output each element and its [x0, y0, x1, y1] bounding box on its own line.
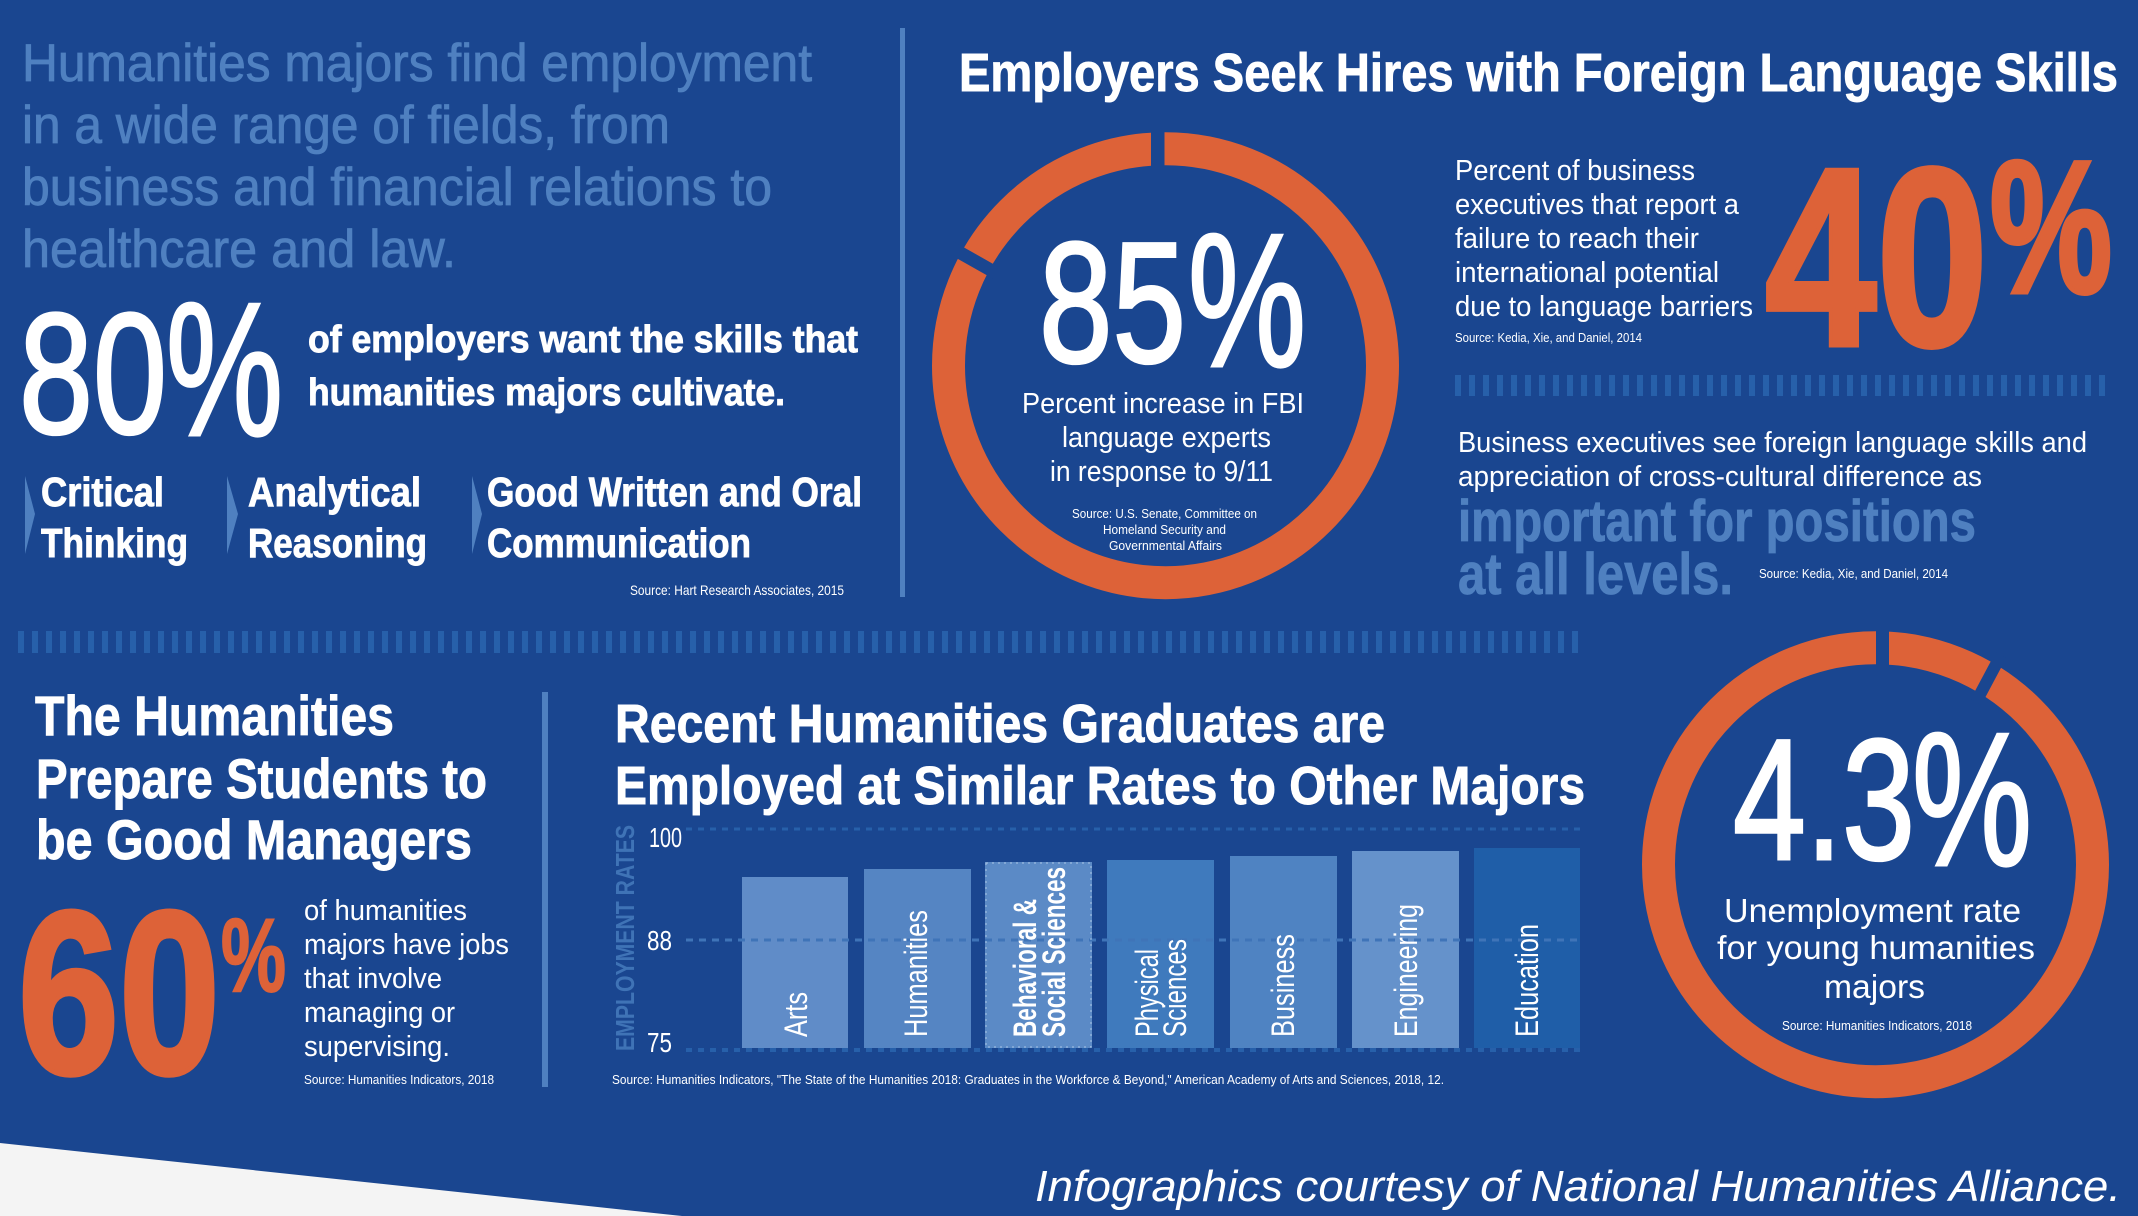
text: language barriers: executives that report a: [1455, 189, 1740, 221]
bar labels: Engineering: [1388, 904, 1424, 1037]
text: important for positions: important for positions: [1458, 489, 1976, 554]
skill: analytical reasoning: [227, 469, 427, 566]
bar: business: [1230, 856, 1337, 1048]
dashed band middle: [18, 631, 1580, 653]
stat: 80 percent: [19, 264, 283, 476]
bar: arts: [742, 877, 848, 1048]
bar labels: Sciences: [1157, 939, 1193, 1037]
skill: critical thinking: Thinking: [41, 520, 188, 566]
text: unemployment rate: [1717, 892, 2035, 1005]
heading: good managers: be Good Managers: [36, 808, 472, 871]
stat description: employers: humanities majors cultivate.: [308, 372, 785, 414]
title: bar chart: [615, 694, 1585, 816]
bar: behavioral and social sciences: [985, 862, 1092, 1048]
text: language barriers: international potential: [1455, 257, 1719, 289]
bar labels: Behavioral &: [1007, 899, 1043, 1037]
text: business executives: Business executives see foreign language skills and: [1458, 427, 2087, 459]
bar chart: [610, 822, 1582, 1058]
bar labels: Humanities: [898, 910, 934, 1037]
skill: critical thinking: [25, 469, 188, 566]
dashed band right: [1455, 375, 2110, 396]
vertical divider top: [900, 28, 905, 597]
text: business executives: appreciation of cross-cultural difference as: [1458, 461, 1982, 493]
text: important for positions: [1458, 489, 1976, 607]
stat: 80 percent: 80: [19, 278, 167, 470]
source: Kedia 2: Source: Kedia, Xie, and Daniel, 2014: [1759, 566, 1948, 581]
credit line: Infographics courtesy of National Humanities Alliance.: [1035, 1162, 2121, 1211]
heading: good managers: [35, 684, 487, 871]
title: bar chart: Employed at Similar Rates to Other Majors: [615, 756, 1585, 816]
stat: 85 percent: 85: [1039, 207, 1186, 399]
white corner wedge: [0, 1143, 682, 1216]
donut: 4.3 percent: [1658, 624, 2092, 1082]
bar: education: [1474, 848, 1580, 1048]
source: Senate: Governmental Affairs: [1109, 538, 1222, 553]
text: managing or supervising: of humanities: [304, 895, 467, 927]
text: FBI language experts: [1022, 388, 1304, 488]
intro heading: business and financial relations to: [22, 158, 772, 217]
bar labels: [778, 867, 1545, 1037]
stat: 60 percent: 60: [18, 864, 220, 1123]
text: language barriers: [1455, 155, 1753, 323]
heading: good managers: The Humanities: [35, 684, 394, 747]
text: FBI language experts: Percent increase in FBI: [1022, 388, 1304, 420]
text: language barriers: Percent of business: [1455, 155, 1695, 187]
source: Senate: [1072, 506, 1257, 553]
stat: 4.3 percent: 4.3: [1733, 704, 1915, 896]
source: indicators 2: Source: Humanities Indicators, 2018: [1782, 1018, 1972, 1033]
heading: good managers: Prepare Students to: [36, 747, 487, 810]
skill: communication: Communication: [487, 520, 751, 566]
stat: 4.3 percent: %: [1912, 694, 2032, 906]
stat: 40 percent: 40: [1765, 115, 1988, 399]
stat: 80 percent: %: [166, 264, 283, 476]
y axis title: EMPLOYMENT RATES: [610, 825, 640, 1051]
title: bar chart: Recent Humanities Graduates are: [615, 694, 1385, 754]
intro heading: in a wide range of fields, from: [22, 96, 670, 155]
source: chart: Source: Humanities Indicators, "The State of the Humanities 2018: Graduates in the Workforce & Beyond," American Academy of Arts and Sciences, 2018, 12.: [612, 1072, 1444, 1087]
stat: 60 percent: %: [221, 898, 286, 1014]
stat: 85 percent: %: [1188, 195, 1306, 407]
text: business executives: [1458, 427, 2087, 493]
bar labels: Arts: [778, 992, 814, 1037]
source: Hart: Source: Hart Research Associates, 2015: [630, 582, 844, 598]
text: managing or supervising: [304, 895, 509, 1063]
bar: physical sciences: [1107, 860, 1214, 1048]
text: managing or supervising: managing or: [304, 997, 455, 1029]
y axis ticks: 100: [649, 822, 682, 853]
skill: analytical reasoning: Analytical: [248, 469, 421, 515]
source: indicators 1: Source: Humanities Indicators, 2018: [304, 1072, 494, 1087]
text: FBI language experts: language experts: [1062, 422, 1271, 454]
skill: analytical reasoning: Reasoning: [248, 520, 427, 566]
text: FBI language experts: in response to 9/11: [1050, 456, 1273, 488]
intro heading: [22, 34, 812, 279]
intro heading: Humanities majors find employment: [22, 34, 812, 93]
source: Kedia 1: Source: Kedia, Xie, and Daniel, 2014: [1455, 330, 1642, 345]
text: unemployment rate: Unemployment rate: [1724, 892, 2021, 929]
donut: 85 percent: [948, 125, 1382, 583]
skill: communication: [472, 469, 862, 566]
y axis ticks: [647, 822, 682, 1058]
stat description: employers: of employers want the skills that: [308, 319, 858, 361]
text: managing or supervising: majors have jobs: [304, 929, 509, 961]
bar: humanities: [864, 869, 971, 1048]
intro heading: healthcare and law.: [22, 220, 456, 279]
bar: engineering: [1352, 851, 1459, 1048]
source: Senate: Homeland Security and: [1103, 522, 1226, 537]
vertical divider bottom: [542, 692, 548, 1087]
bar labels: Physical: [1129, 949, 1165, 1037]
text: managing or supervising: supervising.: [304, 1031, 450, 1063]
text: language barriers: due to language barriers: [1455, 291, 1753, 323]
text: unemployment rate: for young humanities: [1717, 929, 2035, 966]
text: unemployment rate: majors: [1824, 968, 1925, 1005]
skill: communication: Good Written and Oral: [487, 469, 862, 515]
stat description: employers: [308, 319, 858, 414]
stat: 85 percent: [1039, 195, 1306, 407]
skill: critical thinking: Critical: [41, 469, 164, 515]
text: managing or supervising: that involve: [304, 963, 442, 995]
bar labels: Business: [1265, 934, 1301, 1037]
bar labels: Education: [1509, 924, 1545, 1037]
text: important for positions: at all levels.: [1458, 542, 1733, 607]
bar labels: Social Sciences: [1036, 867, 1072, 1037]
y axis ticks: 88: [647, 925, 672, 956]
source: Senate: Source: U.S. Senate, Committee on: [1072, 506, 1257, 521]
text: language barriers: failure to reach their: [1455, 223, 1699, 255]
y axis ticks: 75: [647, 1027, 672, 1058]
